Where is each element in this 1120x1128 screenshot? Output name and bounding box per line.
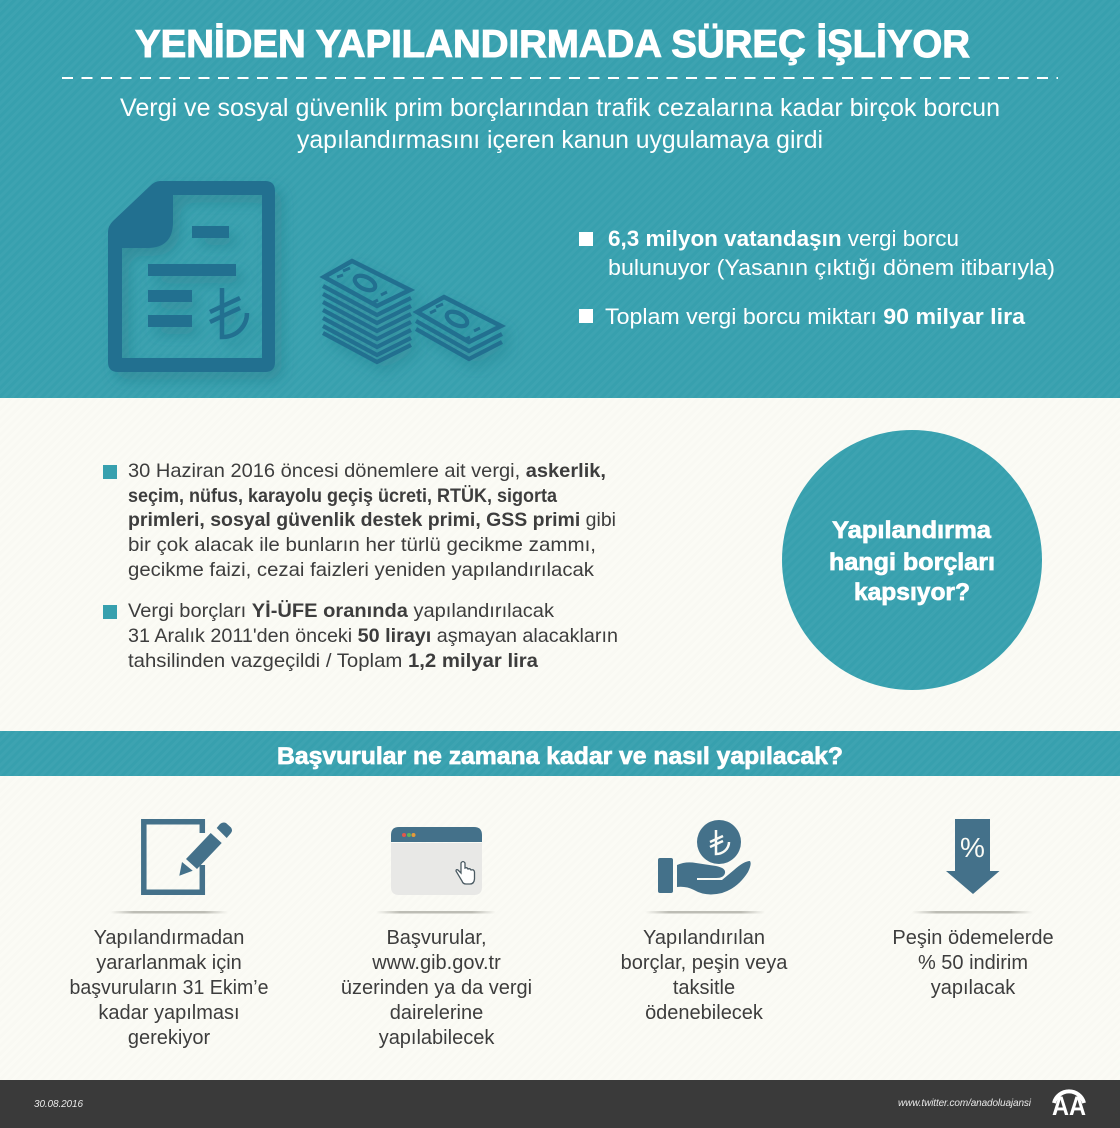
callout: circle question bbox=[782, 430, 1042, 690]
logo: AA: AA bbox=[1052, 1091, 1086, 1121]
icon: percent arrow bbox=[946, 819, 1000, 894]
bullet: taxpayers: bulunuyor (Yasanın çıktığı dönem itibarıyla) bbox=[608, 255, 1055, 280]
panel: coverage text bbox=[103, 460, 618, 672]
title: YENİDEN YAPILANDIRMADA SÜREÇ İŞLİYOR bbox=[135, 23, 970, 66]
callout: circle question: hangi borçları bbox=[829, 549, 995, 576]
source link: www.twitter.com/anadoluajansi bbox=[898, 1098, 1032, 1109]
icon: hand with lira coin bbox=[658, 820, 751, 894]
text block: covered debts: 30 Haziran 2016 öncesi dönemlere ait vergi, askerlik, bbox=[128, 460, 606, 482]
text block: covered debts: seçim, nüfus, karayolu geçiş ücreti, RTÜK, sigorta bbox=[128, 484, 557, 507]
text: how to apply: üzerinden ya da vergi bbox=[341, 977, 532, 999]
text: how to apply: yapılabilecek bbox=[379, 1027, 495, 1049]
text: deadline bbox=[70, 927, 268, 1049]
text: payment bbox=[621, 927, 788, 1024]
callout: circle question: kapsıyor? bbox=[854, 579, 970, 606]
text block: Yİ-ÜFE: 31 Aralık 2011'den önceki 50 lirayı aşmayan alacakların bbox=[128, 625, 618, 647]
icon: document with lira bbox=[108, 181, 275, 372]
column: deadline bbox=[70, 822, 268, 1049]
text: deadline: yararlanmak için bbox=[96, 952, 242, 974]
text: payment: taksitle bbox=[673, 977, 735, 999]
subtitle: yapılandırmasını içeren kanun uygulamaya girdi bbox=[297, 126, 823, 154]
text: how to apply bbox=[341, 927, 532, 1049]
icon: small money stack bbox=[416, 297, 502, 359]
text block: covered debts: bir çok alacak ile bunların her türlü gecikme zammı, bbox=[128, 534, 596, 556]
icon: large money stack bbox=[323, 261, 411, 362]
column: payment bbox=[621, 820, 788, 1024]
bullet: taxpayers bbox=[579, 226, 1055, 280]
heading band: applications: Başvurular ne zamana kadar ve nasıl yapılacak? bbox=[277, 743, 843, 770]
text block: covered debts bbox=[103, 460, 616, 581]
callout: circle question: Yapılandırma bbox=[832, 517, 992, 544]
panel: header bbox=[0, 0, 1120, 398]
text: discount: Peşin ödemelerde bbox=[892, 927, 1054, 949]
text: discount bbox=[892, 927, 1054, 999]
text: how to apply: Başvurular, bbox=[386, 927, 487, 949]
text: deadline: gerekiyor bbox=[128, 1027, 210, 1049]
text block: covered debts: gecikme faizi, cezai faizleri yeniden yapılandırılacak bbox=[128, 559, 594, 581]
icon: percent arrow: % bbox=[960, 832, 985, 863]
subtitle: Vergi ve sosyal güvenlik prim borçlarından trafik cezalarına kadar birçok borcun bbox=[120, 94, 1000, 122]
heading band: applications bbox=[0, 731, 1120, 776]
icon: browser window bbox=[391, 827, 482, 895]
text: deadline: başvuruların 31 Ekim’e bbox=[70, 977, 268, 999]
text block: Yİ-ÜFE: tahsilinden vazgeçildi / Toplam 1,2 milyar lira bbox=[128, 650, 538, 672]
icon: form and pencil bbox=[144, 822, 232, 892]
text: discount: % 50 indirim bbox=[918, 952, 1028, 974]
footer bbox=[0, 1080, 1120, 1128]
bullet: taxpayers: 6,3 milyon vatandaşın vergi borcu bbox=[608, 226, 959, 251]
column: discount bbox=[892, 819, 1054, 999]
text: payment: borçlar, peşin veya bbox=[621, 952, 788, 974]
column: how to apply bbox=[341, 827, 532, 1049]
text: deadline: Yapılandırmadan bbox=[94, 927, 244, 949]
bullet: total debt: Toplam vergi borcu miktarı 90 milyar lira bbox=[605, 304, 1026, 329]
text: payment: Yapılandırılan bbox=[643, 927, 765, 949]
subtitle bbox=[120, 94, 1000, 154]
date: 30.08.2016 bbox=[34, 1099, 83, 1110]
text: deadline: kadar yapılması bbox=[98, 1002, 240, 1024]
text: discount: yapılacak bbox=[931, 977, 1016, 999]
text block: Yİ-ÜFE bbox=[103, 599, 618, 672]
text block: covered debts: primleri, sosyal güvenlik destek primi, GSS primi gibi bbox=[128, 509, 616, 531]
text: how to apply: www.gib.gov.tr bbox=[371, 952, 501, 974]
text: payment: ödenebilecek bbox=[645, 1002, 764, 1024]
text block: Yİ-ÜFE: Vergi borçları Yİ-ÜFE oranında yapılandırılacak bbox=[128, 599, 554, 622]
text: how to apply: dairelerine bbox=[390, 1002, 483, 1024]
